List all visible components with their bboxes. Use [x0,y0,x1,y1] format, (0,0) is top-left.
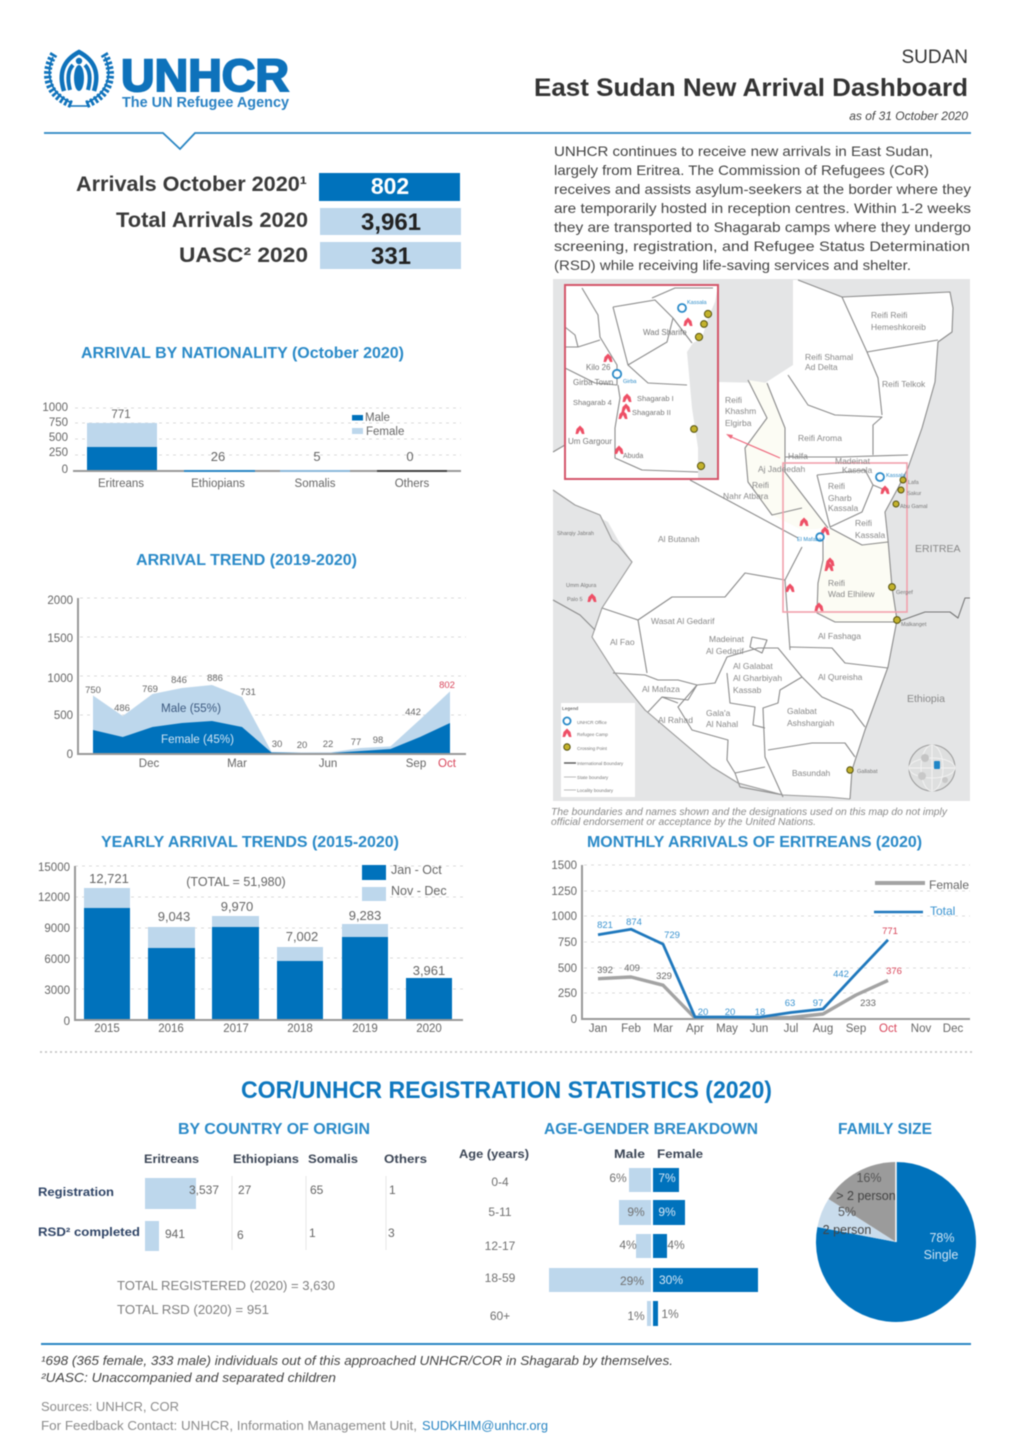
intro paragraph: are temporarily hosted in reception centres. Within 1-2 weeks [554,200,971,216]
panel: age-gender breakdown: Age (years) [459,1147,529,1161]
map labels: Al Qureisha [818,672,863,682]
legend: female / total: Female [929,878,969,892]
chart: monthly arrivals line: Mar [653,1023,673,1035]
chart: monthly arrivals line: Apr [686,1023,704,1035]
chart: arrival trend area: 2000 [47,595,73,607]
map labels: Nahr Atbara [723,491,769,501]
panel: by country of origin: 27 [238,1183,252,1197]
legend: Jan-Oct / Nov-Dec: Nov - Dec [391,884,447,898]
chart: monthly arrivals line: Jul [784,1023,798,1035]
chart: arrival by nationality: 1000 [42,402,68,414]
panel: age-gender breakdown: Male [614,1147,645,1161]
chart: arrival trend area: 0 [67,749,73,761]
map labels: Al Gharbiyah [733,673,782,683]
chart: monthly arrivals line: 63 [785,998,795,1009]
chart: monthly arrivals line: 729 [664,930,680,941]
chart: yearly arrival trends: 3000 [44,985,70,997]
panel: age-gender breakdown: 60+ [490,1309,510,1323]
chart: monthly arrivals line: 18 [755,1007,765,1018]
map labels: Ad Delta [805,362,838,372]
chart: yearly arrival trends: 12000 [38,892,70,904]
map disclaimer: The boundaries and names shown and the designations used on this map do not imply [551,807,948,818]
chart: arrival trend area: 500 [54,710,73,722]
refugee camp icons [576,318,890,611]
legend: male / female: Female [366,426,404,438]
chart: yearly arrival trends: 7,002 [286,929,318,944]
heading: arrival trend: ARRIVAL TREND (2019-2020) [136,552,357,569]
logo: UNHCR: The UN Refugee Agency [122,95,289,111]
heading: monthly arrivals of Eritreans: MONTHLY ARRIVALS OF ERITREANS (2020) [587,834,922,851]
key figures: 802 [371,173,409,199]
panel: by country of origin: 3 [388,1226,395,1240]
key figures: 331 [371,243,411,270]
chart: arrival trend area: 1500 [47,633,73,645]
chart: arrival trend area: 22 [323,739,333,750]
map legend [561,703,635,797]
title block [534,47,968,123]
small map labels: Kassala [886,473,907,479]
chart: yearly arrival trends [38,862,463,1035]
sources and contact [41,1400,548,1433]
heading: yearly arrival trends: YEARLY ARRIVAL TRENDS (2015-2020) [101,834,399,851]
map labels: Halfa [788,451,808,461]
chart: monthly arrivals line: Feb [621,1023,641,1035]
boundaries [553,297,970,799]
map labels: Gharb [828,493,852,503]
heading: arrival by nationality: ARRIVAL BY NATIONALITY (October 2020) [81,345,404,362]
chart: monthly arrivals line: 750 [558,937,577,949]
map labels: Galabat [787,706,817,716]
panel: family size pie chart: 16% [856,1171,882,1185]
chart: monthly arrivals line: Jan [589,1023,607,1035]
panel: by country of origin: Eritreans [144,1152,199,1166]
small map labels: Shagarab II [632,408,671,417]
sources and contact: For Feedback Contact: UNHCR, Information Management Unit, [41,1419,417,1433]
map labels: Al Mafaza [642,684,680,694]
chart: yearly arrival trends: 2016 [158,1023,184,1035]
chart: arrival trend area: Female (45%) [161,734,234,746]
panel: by country of origin: 3,537 [189,1183,219,1197]
chart: monthly arrivals line: 97 [813,998,823,1009]
panel: age-gender breakdown: 9% [627,1205,645,1219]
key figures: UASC² 2020 [179,244,308,267]
map labels: Al Fao [610,637,635,647]
small map labels: Kilo 26 [586,363,611,372]
chart: monthly arrivals line: Sep [846,1023,866,1035]
chart: monthly arrivals line: 250 [558,988,577,1000]
legend: female / total: Total [930,904,955,918]
panel: age-gender breakdown: 7% [658,1171,676,1185]
small map labels: Sharqiy Jabrah [557,531,594,537]
chart: monthly arrivals line: Dec [943,1023,963,1035]
map labels: Madeinat [709,634,745,644]
legend: Jan-Oct / Nov-Dec [362,863,447,901]
footnotes: ¹698 (365 female, 333 male) individuals out of this approached UNHCR/COR in Shagarab by themselves. [41,1354,673,1368]
panel: age-gender breakdown: Female [657,1147,703,1161]
UNHCR office icons [613,304,884,541]
small map labels: Kassala [687,300,708,306]
crossing point icons [691,310,906,773]
panel: age-gender breakdown: 4% [619,1238,637,1252]
chart: yearly arrival trends: 12,721 [89,871,129,886]
chart: arrival by nationality: 500 [49,432,68,444]
chart: arrival trend area: 846 [171,675,187,686]
legend: Jan-Oct / Nov-Dec: Jan - Oct [391,863,442,877]
chart: yearly arrival trends: 2018 [287,1023,313,1035]
sources and contact: Sources: UNHCR, COR [41,1400,179,1414]
map labels: Hemeshkoreib [871,322,926,332]
chart: arrival trend area: 20 [297,740,307,751]
map labels: Kassab [733,685,762,695]
chart: yearly arrival trends: (TOTAL = 51,980) [186,875,286,889]
map labels: Wasat Al Gedarif [651,616,715,626]
map labels: Al Nahal [706,719,738,729]
map labels: Kassala [842,465,873,475]
icon: globe [909,745,955,791]
panel: by country of origin: Ethiopians [233,1152,299,1166]
chart: monthly arrivals line: 376 [886,966,902,977]
panel: age-gender breakdown: 0-4 [491,1175,509,1189]
chart: monthly arrivals line: May [716,1023,738,1035]
map labels: Al Butanah [658,534,700,544]
chart: monthly arrivals line: 874 [626,917,642,928]
map labels: Al Gedarif [706,646,744,656]
panel: by country of origin: TOTAL REGISTERED (2020) = 3,630 [117,1279,335,1293]
small map labels: Sakur [907,491,922,497]
map labels: Reifi [752,480,769,490]
chart: arrival by nationality: Somalis [295,478,336,490]
key figures [76,173,461,270]
small map labels: Palo 5 [567,597,583,603]
panel: by country of origin: 1 [309,1226,316,1240]
small map labels: Girba Town [573,378,613,387]
chart: monthly arrivals line: 771 [882,926,898,937]
chart: monthly arrivals line: 0 [571,1014,577,1026]
chart: arrival by nationality: 5 [313,449,321,464]
map labels: Al Fashaga [818,631,861,641]
map labels: Gala'a [706,708,731,718]
panel: by country of origin: 1 [389,1183,396,1197]
panel: by country of origin: 941 [165,1227,185,1241]
chart: monthly arrivals line: 233 [860,998,876,1009]
map labels: Al Rahad [658,715,693,725]
map labels: Ashshargiah [787,718,835,728]
logo: UNHCR: UNHCR [121,50,289,101]
chart: arrival trend area: 486 [114,703,130,714]
chart: arrival by nationality: 750 [49,417,68,429]
chart: monthly arrivals line: 500 [558,963,577,975]
map labels: Reifi Telkok [882,379,926,389]
map labels: Ethiopia [907,693,945,705]
chart: arrival trend area: Oct [438,758,457,770]
chart: yearly arrival trends: 9,283 [349,908,381,923]
map labels: Elgirba [725,418,752,428]
panel: age-gender breakdown: 1% [661,1307,679,1321]
chart: yearly arrival trends: 2020 [416,1023,442,1035]
chart: arrival trend area: 442 [405,707,421,718]
map labels: Reifi Reifi [871,310,907,320]
intro paragraph: receives and assists asylum-seekers at the border where they [554,181,971,197]
panel: by country of origin: Others [384,1152,427,1166]
small map labels [557,300,928,775]
map legend: Legend [562,706,579,711]
chart: arrival by nationality: 250 [49,447,68,459]
map labels: Wad Elhilew [828,589,875,599]
panel: age-gender breakdown: 29% [620,1274,644,1288]
intro paragraph: screening, registration, and Refugee Status Determination [554,238,970,254]
chart: monthly arrivals line: 1500 [551,860,577,872]
chart: monthly arrivals line: 20 [698,1007,708,1018]
chart: arrival trend area: 802 [439,680,455,691]
chart: arrival by nationality: 26 [211,449,225,464]
panel: age-gender breakdown: 5-11 [488,1205,512,1219]
map labels [610,310,961,778]
panel: age-gender breakdown: 4% [667,1238,685,1252]
map legend: Crossing Point [577,746,608,751]
chart: arrival by nationality [42,402,461,490]
chart: arrival trend area: Sep [406,758,426,770]
chart: arrival trend area [47,595,466,770]
small map labels: Shagarab 4 [573,398,612,407]
chart: monthly arrivals line: 20 [725,1007,735,1018]
chart: yearly arrival trends: 15000 [38,862,70,874]
chart: monthly arrivals line [551,860,970,1035]
chart: monthly arrivals line: 1000 [551,911,577,923]
panel: age-gender breakdown: AGE-GENDER BREAKDOWN [544,1121,758,1138]
chart: arrival trend area: 1000 [47,673,73,685]
small map labels: Abu Gamal [900,504,928,510]
logo: UNHCR [48,50,289,111]
map labels: Reifi [828,578,845,588]
chart: arrival by nationality: 0 [406,449,414,464]
small map labels: Umm Algura [566,583,597,589]
sources and contact: SUDKHIM@unhcr.org [422,1419,548,1433]
small map labels: Wad Sharife [643,328,687,337]
map labels: Kassala [828,503,859,513]
small map labels: Gallabat [857,769,878,775]
icon: UNHCR emblem [48,52,110,106]
title block: as of 31 October 2020 [849,109,968,123]
map labels: Reifi [828,481,845,491]
map labels: Kassala [855,530,886,540]
panel: family size pie chart: 2 person [823,1223,871,1237]
small map labels: Malkanget [901,622,927,628]
chart: arrival trend area: 77 [351,737,361,748]
chart: arrival by nationality: Eritreans [98,478,144,490]
inset boundaries and frame [565,285,718,479]
chart: monthly arrivals line: 392 [597,965,613,976]
small map labels: Lafa [908,480,920,486]
panel: age-gender breakdown [459,1121,758,1326]
panel: age-gender breakdown: 12-17 [485,1239,516,1253]
chart: monthly arrivals line: Aug [813,1023,833,1035]
map labels: Reifi [725,395,742,405]
title block: SUDAN [901,47,968,68]
intro paragraph: largely from Eritrea. The Commission of Refugees (CoR) [554,162,929,178]
small map labels: Um Gargour [568,437,612,446]
chart: arrival trend area: Male (55%) [161,703,221,715]
panel: age-gender breakdown: 9% [658,1205,676,1219]
chart: yearly arrival trends: 9,970 [221,899,253,914]
map labels: Al Galabat [733,661,773,671]
chart: arrival trend area: 769 [142,684,158,695]
chart: arrival trend area: Dec [139,758,159,770]
panel: family size pie chart: 5% [838,1205,856,1219]
map legend: UNHCR Office [577,720,607,725]
panel: by country of origin: 6 [237,1228,244,1242]
chart: monthly arrivals line: Jun [750,1023,768,1035]
map labels: Reifi Shamal [805,352,853,362]
chart: arrival by nationality: 771 [111,409,131,421]
panel: age-gender breakdown: 6% [609,1171,627,1185]
chart: monthly arrivals line: 409 [624,963,640,974]
map labels: Aj Jadeedah [758,464,806,474]
chart: yearly arrival trends: 9000 [44,923,70,935]
footnotes [41,1354,673,1385]
map labels: Reifi [855,518,872,528]
chart: yearly arrival trends: 3,961 [413,963,445,978]
Sudan land area [553,280,953,799]
chart: yearly arrival trends: 2019 [352,1023,378,1035]
chart: yearly arrival trends: 2017 [223,1023,249,1035]
key figures: Total Arrivals 2020 [116,209,308,232]
chart: monthly arrivals line: Oct [879,1023,898,1035]
title block: East Sudan New Arrival Dashboard [534,74,968,102]
intro paragraph: they are transported to Shagarab camps where they undergo [554,219,971,235]
chart: yearly arrival trends: 0 [64,1016,70,1028]
small map labels: Girba [623,379,637,385]
panel: by country of origin: RSD² completed [38,1225,140,1239]
legend: female / total [874,878,969,918]
legend: male / female [352,412,404,438]
chart: arrival trend area: Jun [319,758,337,770]
map legend: State boundary [577,775,609,780]
intro paragraph: (RSD) while receiving life-saving services and shelter. [554,257,911,273]
map labels: Basundah [792,768,831,778]
map legend: International Boundary [577,761,624,766]
panel: age-gender breakdown: 18-59 [485,1271,516,1285]
chart: arrival by nationality: Ethiopians [191,478,245,490]
panel: family size pie chart: > 2 person [836,1189,896,1203]
heading: registration statistics: COR/UNHCR REGISTRATION STATISTICS (2020) [241,1077,772,1104]
small map labels: Gergef [896,590,913,596]
chart: arrival trend area: Mar [227,758,247,770]
small map labels: Abuda [623,453,643,460]
chart: arrival by nationality: 0 [62,464,68,476]
footnotes: ²UASC: Unaccompanied and separated children [41,1371,336,1385]
extent frame and arrow [726,434,907,612]
chart: yearly arrival trends: 2015 [94,1023,120,1035]
panel: map of East Sudan [553,279,970,801]
chart: monthly arrivals line: 1250 [551,886,577,898]
panel: family size pie chart: FAMILY SIZE [838,1121,932,1138]
panel: by country of origin: 65 [310,1183,324,1197]
panel: by country of origin: BY COUNTRY OF ORIGIN [178,1121,370,1138]
chart: arrival trend area: 750 [85,685,101,696]
small map labels: El Mafaza [797,537,822,543]
intro paragraph [554,143,971,273]
key figures: 3,961 [361,209,421,236]
panel: age-gender breakdown: 30% [659,1273,683,1287]
panel: age-gender breakdown: 1% [627,1309,645,1323]
chart: monthly arrivals line: Nov [911,1023,931,1035]
panel: family size pie chart [816,1121,976,1322]
small map labels: Shagarab I [637,394,674,403]
chart: arrival trend area: 98 [373,735,383,746]
map labels: ERITREA [915,543,961,555]
panel: family size pie chart: Single [924,1248,958,1262]
map labels: Madeinat [835,456,871,466]
map legend: Refugee Camp [577,732,608,737]
chart: yearly arrival trends: 6000 [44,954,70,966]
map labels: Reifi Aroma [798,433,842,443]
map labels: Khashm [725,406,756,416]
legend: male / female: Male [365,412,390,424]
key figures: Arrivals October 2020¹ [76,173,307,196]
map disclaimer: official endorsement or acceptance by the United Nations. [551,817,816,828]
panel: by country of origin: TOTAL RSD (2020) = 951 [117,1303,269,1317]
chart: arrival trend area: 886 [207,673,223,684]
panel: by country of origin: Somalis [308,1152,358,1166]
intro paragraph: UNHCR continues to receive new arrivals in East Sudan, [554,143,933,159]
chart: arrival trend area: 30 [272,739,282,750]
chart: monthly arrivals line: 442 [833,969,849,980]
chart: arrival by nationality: Others [395,478,430,490]
panel: family size pie chart: 78% [929,1231,955,1245]
map disclaimer [551,807,948,828]
chart: yearly arrival trends: 9,043 [158,909,190,924]
chart: monthly arrivals line: 821 [597,920,613,931]
panel: by country of origin: Registration [38,1185,114,1199]
map legend: Locality boundary [577,788,614,793]
panel: by country of origin [38,1121,427,1317]
chart: monthly arrivals line: 329 [656,971,672,982]
chart: arrival trend area: 731 [240,687,256,698]
